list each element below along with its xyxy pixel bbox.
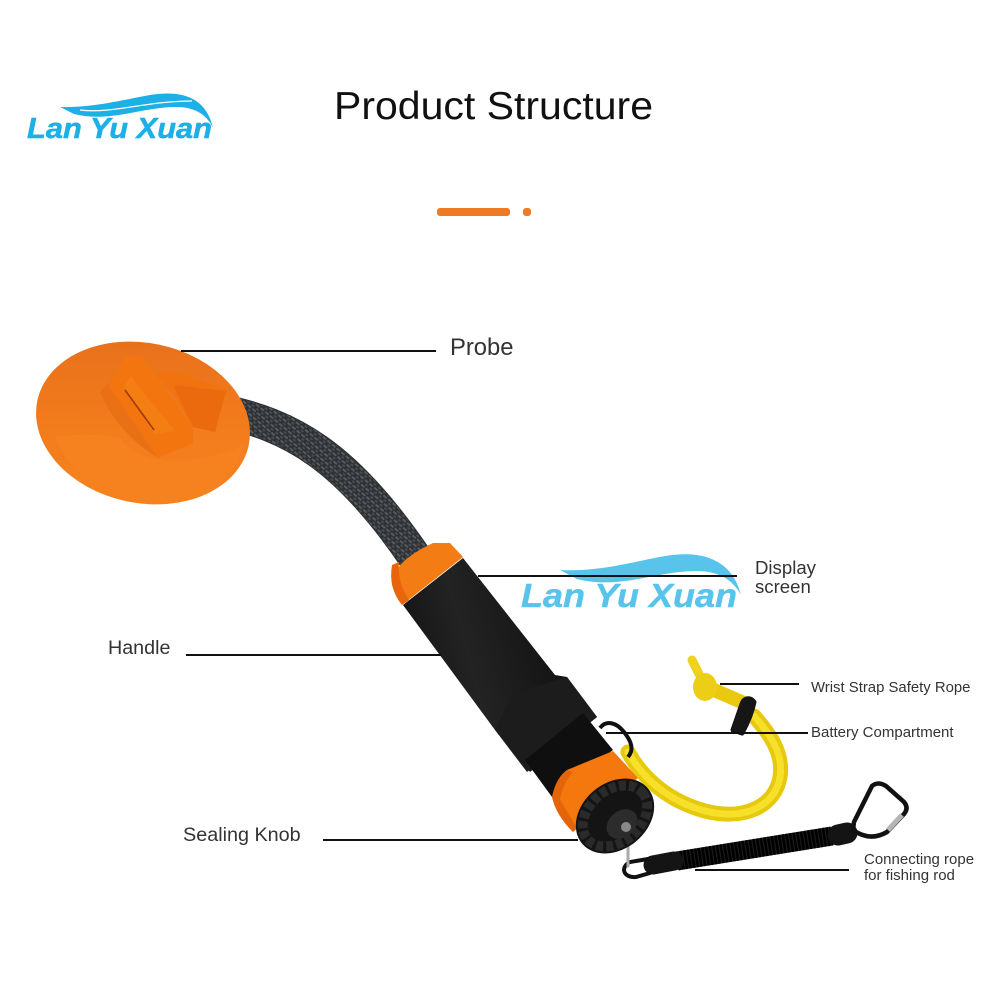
callout: Connecting rope for fishing rod xyxy=(695,851,974,884)
watermark logo: Lan Yu Xuan over center right: Lan Yu Xuan xyxy=(521,577,737,614)
callout: Connecting rope for fishing rod: for fishing rod xyxy=(864,867,955,884)
product: orange probe disc xyxy=(21,322,265,524)
callout: Handle: Handle xyxy=(108,637,170,659)
callout: Probe: Probe xyxy=(450,334,514,361)
callout: Display screen xyxy=(478,557,817,597)
logo: Lan Yu Xuan top left xyxy=(27,93,213,145)
title accent bar xyxy=(437,208,531,216)
product: metal D-ring xyxy=(600,723,631,757)
title: Product Structure xyxy=(334,85,653,128)
watermark logo: Lan Yu Xuan over center right xyxy=(521,554,741,614)
callout: Battery Compartment: Battery Compartment xyxy=(811,724,954,741)
product: sealing knob xyxy=(561,763,669,869)
callout: Wrist Strap Safety Rope: Wrist Strap Safety Rope xyxy=(811,680,970,696)
logo: Lan Yu Xuan top left: Lan Yu Xuan xyxy=(27,113,212,145)
product: flexible shaft xyxy=(222,411,414,556)
product: handle body xyxy=(391,543,638,832)
product: wrist strap rope xyxy=(628,660,781,814)
callout: Connecting rope for fishing rod: Connecting rope xyxy=(864,851,974,868)
callout: Sealing Knob: Sealing Knob xyxy=(183,824,301,846)
product: connecting coil rope with carabiner xyxy=(624,784,906,877)
callout: Display screen: Display xyxy=(755,557,817,578)
callout: Display screen: screen xyxy=(755,576,811,597)
